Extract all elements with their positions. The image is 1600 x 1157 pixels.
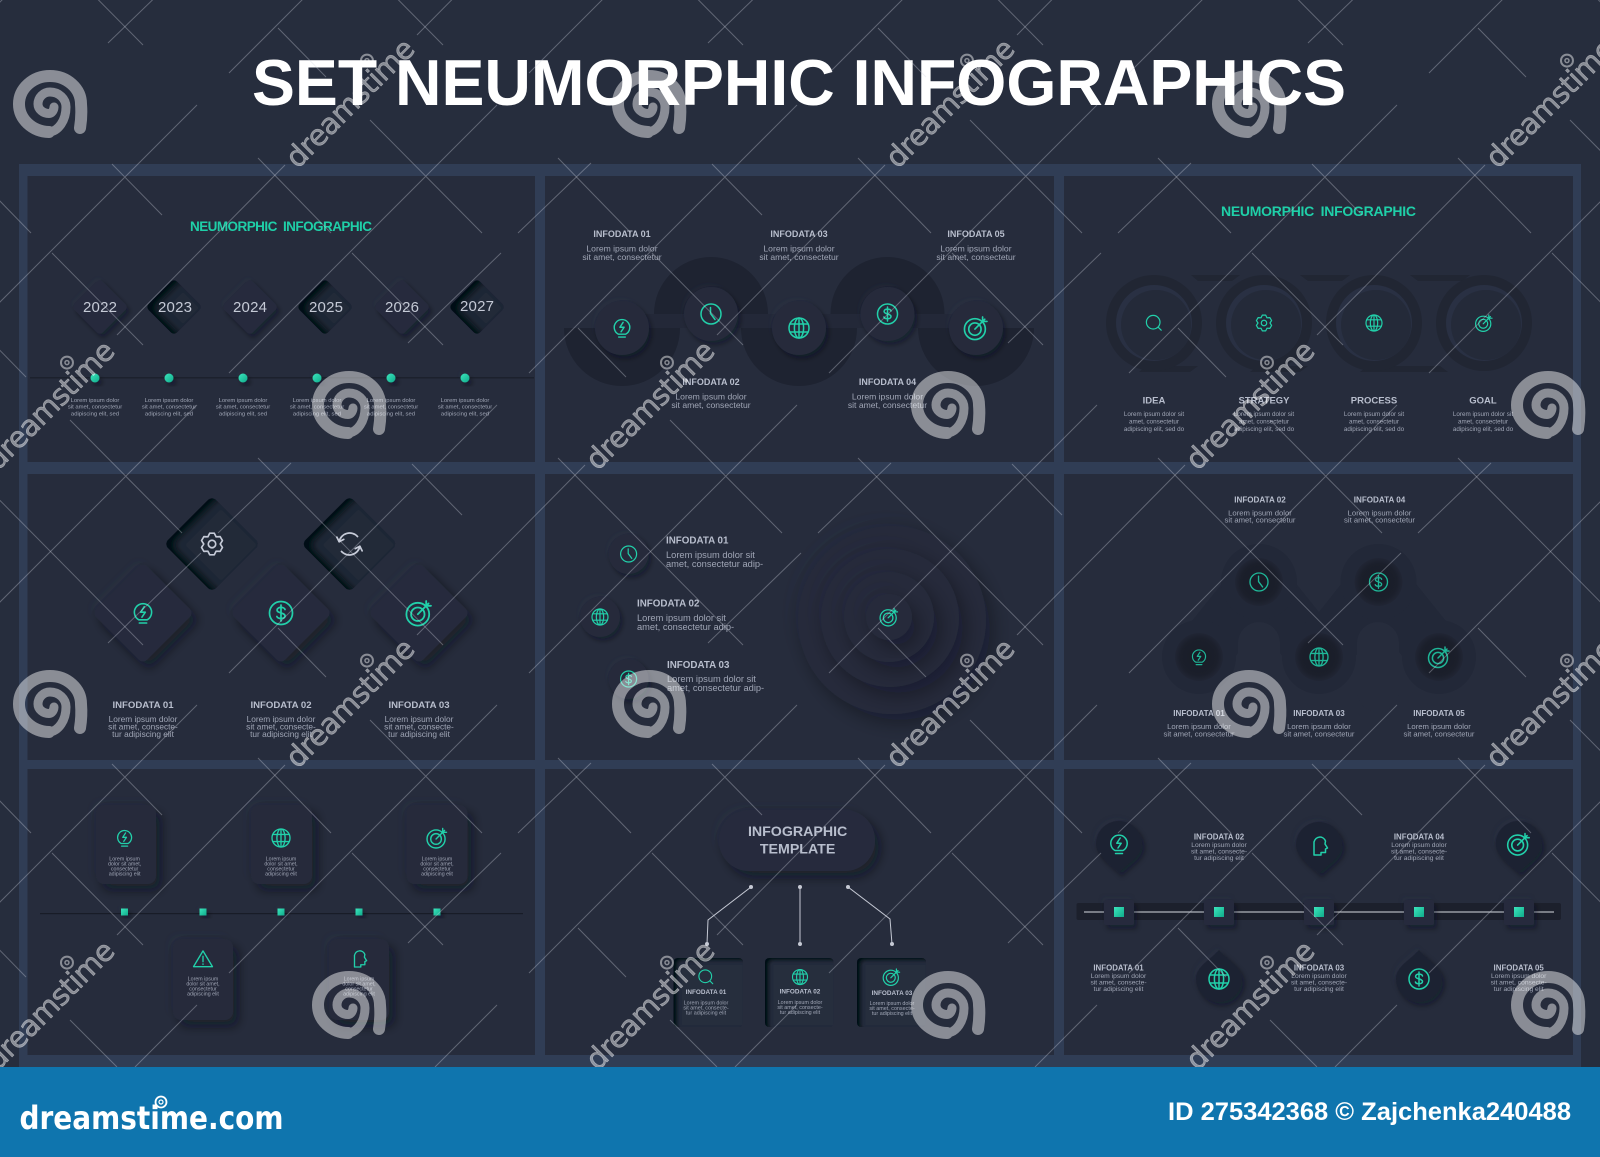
list labels: amet, consectetur adip- (637, 622, 734, 632)
card captions: Lorem ipsum (344, 976, 375, 982)
card captions: adipiscing elit (343, 991, 375, 997)
card captions: adipiscing elit (109, 872, 141, 878)
timeline labels: INFODATA 04 (1394, 833, 1445, 842)
chain labels: adipiscing elit, sed do (1124, 426, 1185, 433)
diamond labels (108, 700, 454, 739)
blob labels: sit amet, consectetur (1344, 516, 1415, 525)
box labels: INFODATA 02 (780, 989, 821, 996)
card captions: dolor sit amet, (342, 981, 376, 987)
blob labels: sit amet, consectetur (1164, 729, 1235, 738)
blob labels: INFODATA 01 (1173, 709, 1225, 718)
wave labels (582, 229, 1016, 410)
box labels: tur adipiscing elit (872, 1011, 913, 1017)
icon: bulb (118, 830, 132, 846)
icon: target (1428, 647, 1449, 668)
wave labels: INFODATA 03 (770, 229, 828, 239)
timeline line (40, 913, 523, 914)
timeline labels: tur adipiscing elit (1494, 986, 1544, 993)
concentric discs (798, 526, 986, 714)
panel: org tree (545, 769, 1054, 1055)
diamond labels: INFODATA 03 (388, 700, 450, 711)
diamonds with years: 2022 (83, 299, 117, 316)
diamond labels: Lorem ipsum dolor (109, 714, 178, 724)
timeline labels: INFODATA 02 (1194, 833, 1245, 842)
timeline labels: Lorem ipsum dolor (1091, 973, 1147, 980)
footer logo: dreamstime.com (20, 1099, 284, 1137)
list labels: INFODATA 01 (666, 536, 729, 547)
blob labels: sit amet, consectetur (1225, 516, 1296, 525)
diamond labels: sit amet, consecte- (384, 722, 454, 732)
chain labels: amet, consectetur (1458, 419, 1508, 426)
heading: NEUMORPHIC INFOGRAPHIC (190, 219, 372, 234)
timeline labels: tur adipiscing elit (1094, 986, 1144, 993)
box labels: sit amet, consecte- (683, 1005, 729, 1011)
wave labels: INFODATA 05 (947, 229, 1005, 239)
wave labels: Lorem ipsum dolor (763, 244, 835, 254)
card captions: adipiscing elit (265, 872, 297, 878)
card captions: Lorem ipsum (109, 857, 140, 863)
card captions: Lorem ipsum (422, 857, 453, 863)
inset boxes (674, 958, 926, 1027)
panel: chain of circles (1064, 176, 1573, 462)
wave labels: Lorem ipsum dolor (852, 392, 923, 402)
icon: refresh (337, 533, 362, 555)
card captions: adipiscing elit (421, 872, 453, 878)
list labels: INFODATA 02 (637, 599, 700, 610)
icon: clock (621, 546, 637, 562)
icon: search (699, 970, 713, 984)
panel: year timeline (28, 176, 535, 462)
diamonds with years (72, 279, 505, 335)
drops (1096, 821, 1542, 1002)
icon: head (354, 951, 367, 967)
blob labels (1164, 496, 1475, 738)
blob labels: sit amet, consectetur (1404, 729, 1475, 738)
list labels: Lorem ipsum dolor sit (666, 550, 755, 560)
diamond labels: sit amet, consecte- (246, 722, 316, 732)
wave labels: sit amet, consectetur (582, 252, 662, 262)
icon: target (883, 969, 900, 985)
wave labels: INFODATA 02 (682, 377, 740, 387)
blob wells (1175, 558, 1463, 681)
chain labels: adipiscing elit, sed do (1344, 426, 1405, 433)
timeline captions: adipiscing elit, sed (441, 411, 489, 417)
chain labels: amet, consectetur (1349, 419, 1399, 426)
diamond labels: tur adipiscing elit (250, 729, 313, 739)
blob labels: INFODATA 03 (1293, 709, 1345, 718)
icon: globe (1366, 315, 1382, 331)
timeline captions (68, 398, 492, 417)
timeline labels: sit amet, consecte- (1391, 848, 1447, 856)
timeline captions: adipiscing elit, sed (71, 411, 119, 417)
panel: drops timeline (1064, 769, 1573, 1055)
timeline labels: tur adipiscing elit (1394, 855, 1444, 862)
diamonds with years: 2023 (158, 299, 192, 316)
icon: gear (202, 533, 222, 555)
box labels: sit amet, consecte- (869, 1006, 915, 1012)
icon: dollar (621, 671, 637, 687)
small discs (580, 534, 649, 699)
pill text: TEMPLATE (760, 841, 835, 857)
timeline captions: Lorem ipsum dolor (219, 398, 267, 404)
card captions: consectetur (423, 867, 451, 873)
icon: head (1314, 837, 1328, 855)
panel: cards timeline (28, 769, 535, 1055)
panel: wave (545, 176, 1054, 462)
icon: bulb (614, 320, 630, 337)
timeline nodes (1104, 900, 1534, 925)
timeline squares (121, 908, 440, 916)
timeline labels: INFODATA 01 (1093, 964, 1144, 973)
icon: target (406, 601, 431, 626)
connectors (705, 885, 894, 946)
pill (719, 810, 875, 871)
chain bars (1139, 275, 1470, 372)
diamond labels: INFODATA 02 (250, 700, 312, 711)
timeline light line (1084, 911, 1554, 913)
box labels: tur adipiscing elit (686, 1010, 727, 1016)
diamond labels: tur adipiscing elit (112, 729, 175, 739)
wave labels: Lorem ipsum dolor (675, 392, 747, 402)
card captions: dolor sit amet, (420, 862, 454, 868)
chain labels: Lorem ipsum dolor sit (1234, 411, 1294, 418)
chain labels: adipiscing elit, sed do (1234, 426, 1295, 433)
cards (96, 805, 468, 1020)
list labels: Lorem ipsum dolor sit (667, 674, 756, 684)
timeline labels: INFODATA 05 (1494, 964, 1544, 973)
timeline captions: Lorem ipsum dolor (145, 398, 193, 404)
icon: globe (1209, 969, 1229, 989)
wave labels: Lorem ipsum dolor (586, 244, 658, 254)
blob labels: INFODATA 02 (1234, 496, 1286, 505)
list labels: INFODATA 03 (667, 660, 730, 671)
icon: target (427, 828, 446, 848)
icon: dollar (1370, 573, 1388, 591)
card captions: Lorem ipsum (266, 857, 297, 863)
blob labels: INFODATA 05 (1413, 709, 1465, 718)
card captions: dolor sit amet, (186, 981, 220, 987)
wave labels: sit amet, consectetur (936, 252, 1016, 262)
icon: globe (789, 318, 809, 338)
pill text: INFOGRAPHIC (748, 824, 847, 840)
wave labels: sit amet, consectetur (759, 252, 839, 262)
pill text (748, 824, 847, 857)
timeline captions: Lorem ipsum dolor (367, 398, 415, 404)
list labels: amet, consectetur adip- (667, 683, 764, 693)
timeline captions: adipiscing elit, sed (367, 411, 415, 417)
grid frame (19, 164, 1581, 1067)
blob labels: Lorem ipsum dolor (1167, 722, 1231, 731)
timeline labels: sit amet, consecte- (1291, 980, 1347, 986)
box labels (683, 989, 915, 1017)
card captions: adipiscing elit (187, 991, 219, 997)
blob labels: Lorem ipsum dolor (1287, 722, 1351, 731)
chain rings (1106, 275, 1532, 371)
wave labels: sit amet, consectetur (848, 400, 927, 410)
wave discs (595, 287, 1003, 355)
chain labels: amet, consectetur (1239, 419, 1289, 426)
box labels: INFODATA 01 (686, 989, 727, 996)
timeline labels: Lorem ipsum dolor (1491, 973, 1547, 980)
diamonds with years: 2025 (309, 299, 343, 316)
timeline labels: Lorem ipsum dolor (1191, 842, 1247, 849)
diamonds with years: 2027 (460, 298, 494, 315)
raised diamonds (92, 562, 470, 664)
icon: clock (1250, 573, 1268, 591)
timeline captions: sit amet, consectetur (216, 405, 270, 411)
icon: globe (1310, 648, 1328, 666)
diamond labels: tur adipiscing elit (388, 729, 451, 739)
icon: target (1508, 834, 1529, 855)
chain labels: GOAL (1469, 396, 1497, 407)
list labels: Lorem ipsum dolor sit (637, 613, 726, 623)
list labels (637, 536, 764, 693)
box labels: Lorem ipsum dolor (684, 1000, 729, 1006)
wave labels: INFODATA 01 (593, 229, 651, 239)
icon: search (1146, 315, 1161, 330)
chain labels: adipiscing elit, sed do (1453, 426, 1514, 433)
timeline captions: adipiscing elit, sed (219, 411, 267, 417)
timeline captions: sit amet, consectetur (290, 405, 344, 411)
timeline captions: sit amet, consectetur (438, 405, 492, 411)
timeline captions: sit amet, consectetur (142, 405, 196, 411)
timeline captions: Lorem ipsum dolor (441, 398, 489, 404)
chain labels: IDEA (1143, 396, 1165, 407)
blob labels: sit amet, consectetur (1284, 729, 1355, 738)
box labels: Lorem ipsum dolor (778, 1000, 823, 1006)
wave labels: INFODATA 04 (859, 377, 916, 387)
chain labels: PROCESS (1351, 396, 1397, 407)
panel: diamonds (28, 474, 535, 760)
title: SET NEUMORPHIC INFOGRAPHICS (252, 46, 1346, 119)
timeline captions: sit amet, consectetur (68, 405, 122, 411)
diamond labels: INFODATA 01 (112, 700, 174, 711)
icon: bulb (134, 604, 152, 623)
chain labels: Lorem ipsum dolor sit (1453, 411, 1513, 418)
timeline captions: Lorem ipsum dolor (71, 398, 119, 404)
timeline labels: Lorem ipsum dolor (1391, 842, 1447, 849)
card captions: consectetur (111, 867, 139, 873)
card captions: dolor sit amet, (108, 862, 141, 868)
icon: bulb (1192, 650, 1206, 665)
box labels: tur adipiscing elit (780, 1010, 821, 1016)
icon: dollar (878, 304, 898, 324)
diamond labels: Lorem ipsum dolor (385, 714, 454, 724)
timeline labels (1090, 833, 1547, 993)
box labels: Lorem ipsum dolor (870, 1001, 915, 1007)
wave labels: Lorem ipsum dolor (940, 244, 1012, 254)
blob labels: Lorem ipsum dolor (1407, 722, 1471, 731)
blob labels: Lorem ipsum dolor (1348, 508, 1412, 517)
icon: target (1476, 315, 1492, 331)
chain labels (1124, 396, 1514, 433)
chain labels: STRATEGY (1238, 396, 1290, 407)
diamond labels: sit amet, consecte- (108, 722, 178, 732)
box labels: INFODATA 03 (872, 990, 913, 997)
icon: clock (701, 304, 721, 324)
icon: dollar (1409, 969, 1429, 989)
chain labels: Lorem ipsum dolor sit (1344, 411, 1404, 418)
timeline captions: sit amet, consectetur (364, 405, 418, 411)
card captions (108, 857, 454, 997)
card captions: Lorem ipsum (188, 976, 219, 982)
timeline captions: Lorem ipsum dolor (293, 398, 341, 404)
diamond labels: Lorem ipsum dolor (247, 714, 316, 724)
heading: NEUMORPHIC INFOGRAPHIC (1221, 203, 1416, 219)
panel: blob (1064, 474, 1573, 760)
wave labels: sit amet, consectetur (671, 400, 751, 410)
box labels: sit amet, consecte- (777, 1005, 823, 1011)
card captions: consectetur (345, 986, 373, 992)
icon: target (964, 317, 987, 340)
icon: dollar (270, 602, 292, 624)
diamonds with years: 2026 (385, 299, 419, 316)
icon: warning (194, 951, 212, 967)
footer credit: ID 275342368 © Zajchenka240488 (1168, 1098, 1571, 1126)
timeline band (1076, 903, 1561, 920)
timeline labels: tur adipiscing elit (1294, 986, 1344, 993)
panel: concentric target (545, 474, 1054, 760)
chain labels: Lorem ipsum dolor sit (1124, 411, 1184, 418)
icon: globe (592, 609, 608, 625)
icon: gear (1256, 315, 1272, 331)
blob labels: INFODATA 04 (1354, 496, 1406, 505)
icon: globe (272, 829, 290, 847)
diamonds with years: 2024 (233, 299, 267, 316)
footer band (0, 1067, 1600, 1157)
list labels: amet, consectetur adip- (666, 559, 763, 569)
timeline labels: sit amet, consecte- (1491, 980, 1547, 986)
chain labels: amet, consectetur (1129, 419, 1179, 426)
timeline dots (90, 374, 470, 382)
timeline captions: adipiscing elit, sed (145, 411, 193, 417)
card captions: consectetur (267, 867, 295, 873)
timeline line (30, 377, 534, 378)
timeline captions: adipiscing elit, sed (293, 411, 341, 417)
wave shape (564, 257, 1034, 386)
inset diamonds (164, 496, 398, 592)
blob labels: Lorem ipsum dolor (1228, 508, 1292, 517)
icon: target (880, 608, 898, 626)
card captions: consectetur (189, 986, 217, 992)
card captions: dolor sit amet, (264, 862, 298, 868)
timeline labels: sit amet, consecte- (1191, 848, 1247, 856)
timeline labels: Lorem ipsum dolor (1291, 973, 1347, 980)
timeline labels: INFODATA 03 (1294, 964, 1345, 973)
icon: bulb (1111, 835, 1127, 854)
timeline labels: tur adipiscing elit (1194, 855, 1244, 862)
icon: globe (792, 970, 808, 984)
blob shape (1162, 544, 1476, 712)
timeline labels: sit amet, consecte- (1090, 980, 1147, 986)
